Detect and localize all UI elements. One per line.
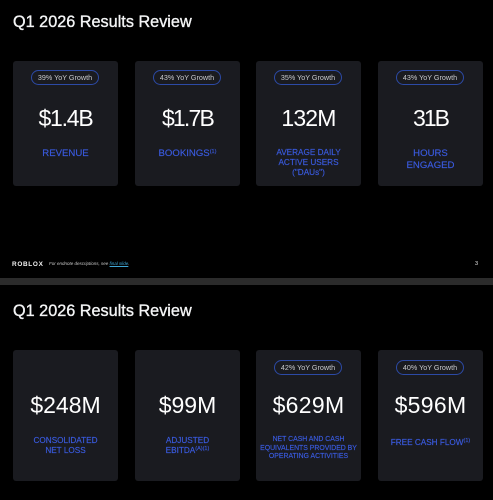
growth pill <box>396 360 464 375</box>
panel: net cash from operations <box>256 350 361 481</box>
growth pill <box>31 70 99 85</box>
panel: hours engaged <box>378 61 483 186</box>
panel: consolidated net loss <box>13 350 118 481</box>
growth pill <box>274 70 342 85</box>
label: NET CASH AND CASH <box>273 436 344 443</box>
page number: 3 <box>475 261 478 267</box>
label: AVERAGE DAILY <box>276 148 341 157</box>
value: $629M <box>273 392 344 418</box>
value: $596M <box>395 392 466 418</box>
value: 132M <box>281 105 336 131</box>
panel: free cash flow <box>378 350 483 481</box>
growth pill: 43% YoY Growth <box>403 73 457 82</box>
growth pill: 42% YoY Growth <box>281 363 335 372</box>
label: REVENUE <box>42 148 89 159</box>
logo: Roblox wordmark: ROBLOX <box>12 261 44 268</box>
value: 31B <box>413 105 448 131</box>
value: $1.4B <box>38 105 93 131</box>
growth pill: 43% YoY Growth <box>160 73 214 82</box>
value: $248M <box>30 392 101 418</box>
panel: revenue <box>13 61 118 186</box>
panel: bookings <box>135 61 240 186</box>
growth pill <box>274 360 342 375</box>
label: ADJUSTED <box>166 436 209 445</box>
value: $1.7B <box>162 105 213 131</box>
value: $99M <box>159 392 216 418</box>
label <box>406 148 454 171</box>
label: EQUIVALENTS PROVIDED BY <box>260 445 357 452</box>
growth pill: 40% YoY Growth <box>403 363 457 372</box>
title: bottom slide: Q1 2026 Results Review <box>13 301 192 320</box>
label: FREE CASH FLOW(1) <box>391 438 470 447</box>
panel: daily active users <box>256 61 361 186</box>
label: OPERATING ACTIVITIES <box>269 453 348 460</box>
label: CONSOLIDATED <box>34 436 98 445</box>
label: NET LOSS <box>45 446 86 455</box>
label: ("DAUs") <box>292 168 325 177</box>
label: ENGAGED <box>406 160 454 171</box>
label <box>260 436 357 460</box>
growth pill: 39% YoY Growth <box>38 73 92 82</box>
growth pill: 35% YoY Growth <box>281 73 335 82</box>
label: BOOKINGS(1) <box>159 148 216 159</box>
label <box>34 436 98 455</box>
footnote: For endnote descriptions, see final slide. <box>49 261 130 266</box>
label: HOURS <box>413 148 448 159</box>
growth pill <box>396 70 464 85</box>
slide divider <box>0 278 493 285</box>
label <box>166 436 210 455</box>
label: EBITDA(A)(1) <box>166 446 209 455</box>
panel: adjusted EBITDA <box>135 350 240 481</box>
growth pill <box>153 70 221 85</box>
label <box>276 148 341 177</box>
title: top slide: Q1 2026 Results Review <box>13 12 192 31</box>
label: ACTIVE USERS <box>278 158 339 167</box>
